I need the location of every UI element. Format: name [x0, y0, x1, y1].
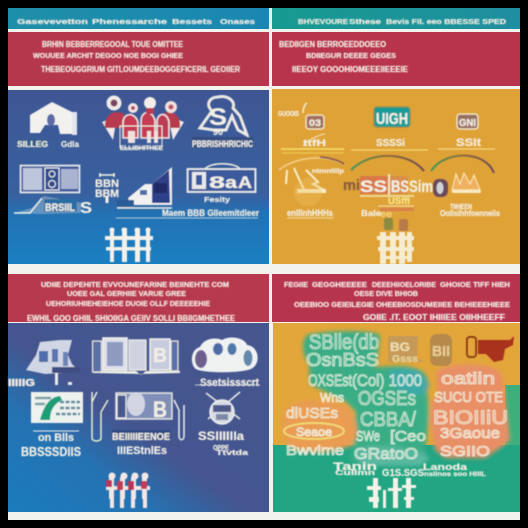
text block: top left red: [33, 40, 240, 74]
icon: small badge left: GUOOIS: [278, 111, 299, 118]
text cluster: green blob: GRatoO: [354, 446, 418, 463]
text block: bottom right red: GEGGHEEEEE: [312, 280, 367, 289]
text cluster: green blob: [306, 331, 426, 463]
icon: map card: on Blls: [38, 432, 74, 444]
text block: bottom right red: GOIIE .IT. EOOT IHIIIEE OIIHHEEFF: [363, 312, 505, 322]
icon: sign panel with label: [188, 164, 256, 204]
icon: circle emblem: SSIIIIIIa: [198, 429, 244, 443]
text block: top right red: IIEEOY GOOOHIOMEEEIIEEEIE: [292, 65, 409, 74]
icon: cloud: [192, 338, 260, 389]
text cluster: orange blob left: [284, 405, 344, 458]
icon: centre sign: [343, 174, 448, 219]
chart blobs: coloured word clusters: [282, 331, 510, 466]
panel: top right: [272, 8, 520, 264]
icon: centre sign: USffI: [388, 196, 410, 206]
text cluster: orange blob right: BIOIIiU: [433, 408, 508, 429]
heading: top left banner: Onases: [220, 19, 255, 26]
caption: under clusters: Lanoda: [423, 462, 468, 472]
icon: tablet with tubes: BEIIIIIEENOE: [112, 432, 170, 443]
icon: circle emblem: [198, 392, 248, 457]
heading: top left banner: Phenessarche: [92, 19, 167, 26]
icon: people row: [105, 228, 153, 262]
text cluster: green blob: [Ceo: [390, 428, 426, 445]
text block: bottom right red: [284, 280, 510, 322]
caption: middle row: Maem BBB Glleemitdleer: [162, 208, 259, 218]
icon: tablet with tubes: IIIEStnlEs: [117, 445, 167, 457]
icon: flame bread right: TIIHEEN: [450, 202, 472, 211]
text cluster: green blob: OXSEst: [308, 371, 352, 390]
icon: sign panel with label: 8: [209, 173, 225, 192]
icon: framed panel with banner: S: [80, 200, 92, 217]
icon: group of people: ELLIBHITHEE: [120, 146, 163, 152]
icon: centre sign: Bale: [361, 209, 382, 218]
icon: house: Gdla: [61, 139, 79, 149]
icon: circle emblem: Ttvtda: [216, 450, 248, 457]
panel: bottom right: [272, 274, 520, 512]
icon: left illustration: ntmnilllp: [312, 168, 344, 175]
text block: bottom right red: FEGIIE: [284, 280, 308, 289]
icon: framed panel with banner: BRSIIL: [45, 202, 75, 214]
text block: top left red: THEBEOUGGRIUM GITLOUMDEEBOGGEFICERIL GEOIIER: [41, 65, 240, 74]
icon: centre sign: SS: [360, 177, 387, 196]
text block: bottom left red: UEHORIUHIIEHEIEHOE DUOIE OLLF DEEEEEHIE: [46, 301, 210, 308]
icon: sign panel with label: Fesity: [204, 197, 230, 204]
icon: teal badge centre: [374, 107, 410, 149]
icon: small badge left: ttfH: [303, 138, 326, 148]
icon: flame bread right: Oollsihhfoenneiis: [440, 209, 500, 218]
text block: bottom left red: UDIIE DEPEHITE EVVOUNEFARINE BEIINEHTE COM: [41, 280, 229, 289]
text block: top right red: [279, 40, 409, 74]
text cluster: green blob: OsnBsS: [306, 350, 379, 370]
icon: centre sign: BSSim: [391, 177, 433, 196]
text cluster: orange blob right: SGIIO: [440, 443, 490, 460]
icon: left illustration: enlllnhHHHs: [287, 208, 333, 218]
text cluster: orange blob left: Seaoe: [296, 425, 332, 439]
icon: people row red: [106, 472, 150, 508]
icon: tan emblems top: [388, 334, 452, 366]
icon: map card: [21, 392, 83, 459]
icon: map card: BBSSSDIIS: [21, 444, 81, 459]
text block: bottom right red: DEEEHIIOELORIBE: [372, 280, 436, 289]
caption: under clusters: G1S.SGS: [382, 468, 424, 479]
icon: tan emblems top: BG: [390, 340, 410, 354]
text block: bottom left red: EWHIL GOO GHIIL SHIOIIGA GEIIV SOLLI BBIIGMHETHEE: [27, 313, 235, 323]
icon: teal badge centre: UIGH: [376, 111, 408, 128]
icon: figure with symbol: 90: [213, 127, 223, 137]
icon: group of people: [102, 96, 184, 152]
icon: open book: [92, 338, 180, 375]
icon: tablet with tubes: B: [153, 397, 167, 422]
icon: people row white: [367, 478, 416, 508]
caption: under clusters: Tanin: [333, 461, 377, 473]
icon: figure with symbol: [192, 97, 253, 149]
text cluster: green blob: CBBA/: [360, 409, 416, 431]
icon: left illustration: [286, 168, 344, 218]
text block: bottom right red: OEEBIOO GEIEILEGIE OHEEBIOSDUMEIIEE BEHIEEEHIEEE: [294, 302, 510, 309]
text cluster: green blob: SBlle(db: [309, 331, 379, 354]
text cluster: green blob: OGSEs: [358, 388, 416, 410]
text cluster: orange blob right: SUCU OTE: [434, 389, 503, 406]
panel: bottom left: [8, 274, 269, 512]
icon: small badge left: [278, 103, 326, 148]
icon: small badge right: [456, 114, 481, 149]
icon: tan emblems top: BII: [432, 343, 450, 360]
heading: top right banner: Bevis Fil. eeo BBESSE SPED: [386, 19, 506, 26]
icon: small badge left: 03: [309, 118, 321, 128]
icon: open book: B: [153, 345, 167, 367]
text block: top right red: BEDIIGEN BERROEEDDOEEO: [279, 40, 386, 49]
text cluster: green blob: SWe: [356, 428, 380, 445]
icon: figure with symbol: PBBRISHHRICHIC: [192, 139, 253, 149]
icon: cloud: Ssetsissscrt: [200, 377, 259, 389]
text cluster: orange blob right: oatiin: [441, 369, 495, 388]
icon: small badge right: GNI: [459, 118, 476, 129]
text block: bottom left red: [27, 280, 235, 323]
icon: building cluster: [8, 340, 80, 389]
icon: tan emblems top: Gsss: [392, 354, 418, 365]
icon: house: [17, 102, 79, 149]
heading: top right banner: [298, 19, 506, 26]
text block: bottom left red: UOEE GAL GERHIIE VARUE GREE: [67, 291, 186, 298]
icon: house with dark gable: [116, 167, 258, 218]
text block: bottom right red: GHOIOE TIFF HIEH: [440, 280, 510, 289]
icon: teal badge centre: SSSSi: [376, 138, 405, 149]
icon: people row with fruit: [377, 218, 414, 264]
icon: small castle: BBN: [95, 178, 119, 190]
icon: sign panel with label: A: [238, 173, 252, 192]
icon: flame bread right: [440, 173, 500, 218]
text block: top left red: WOUUEE ARCHIT DEGOO NOE BOGI GHIEE: [33, 51, 183, 60]
icon: figure with symbol: S: [209, 104, 227, 131]
text cluster: green blob: Wns: [320, 390, 344, 405]
text cluster: green blob: (Col) 1000: [352, 371, 422, 390]
text cluster: orange blob left: Bwvlme: [286, 442, 344, 458]
icon: tablet with tubes: [92, 392, 184, 457]
icon: centre sign: ee: [380, 209, 392, 219]
text block: top right red: BDIIEGUR DEEEE GEGES: [306, 51, 396, 60]
icon: sign panel with label: a: [225, 173, 238, 192]
heading: top left banner: Bessets: [172, 19, 212, 26]
heading: top left banner: Gasevevetton: [17, 19, 88, 26]
icon: building cluster: IIIIIG: [8, 378, 35, 389]
heading: top left banner: [17, 19, 255, 26]
icon: small castle: [95, 173, 119, 203]
text cluster: orange blob right: [433, 369, 508, 460]
icon: small castle: BBM: [95, 188, 119, 200]
text cluster: orange blob right: 3Gaoue: [440, 425, 500, 442]
text block: bottom right red: OESE DIVE BHIOB: [354, 291, 418, 298]
icon: circle emblem: OPPE: [213, 445, 229, 452]
icon: megaphone: [467, 336, 514, 362]
caption: under clusters: nsiinos soo HIIIL: [424, 471, 486, 478]
heading: top right banner: Sthese: [349, 19, 381, 26]
text block: top left red: BRHIN BEBBERREGOOAL TOUE OMITTEE: [42, 40, 184, 49]
panel: top left: [8, 8, 269, 264]
text cluster: orange blob left: dlUSEs: [286, 405, 338, 422]
icon: small badge right: SSIt: [456, 137, 481, 149]
caption: under clusters: Cullmn: [335, 470, 375, 477]
icon: house: SILLEG: [17, 139, 48, 149]
icon: centre sign: mi: [343, 177, 360, 194]
caption: under clusters: [333, 461, 486, 479]
dividers and arcs: [279, 149, 495, 173]
icon: framed panel with banner: [14, 166, 92, 217]
heading: top right banner: BHVEVOURE: [298, 19, 348, 26]
